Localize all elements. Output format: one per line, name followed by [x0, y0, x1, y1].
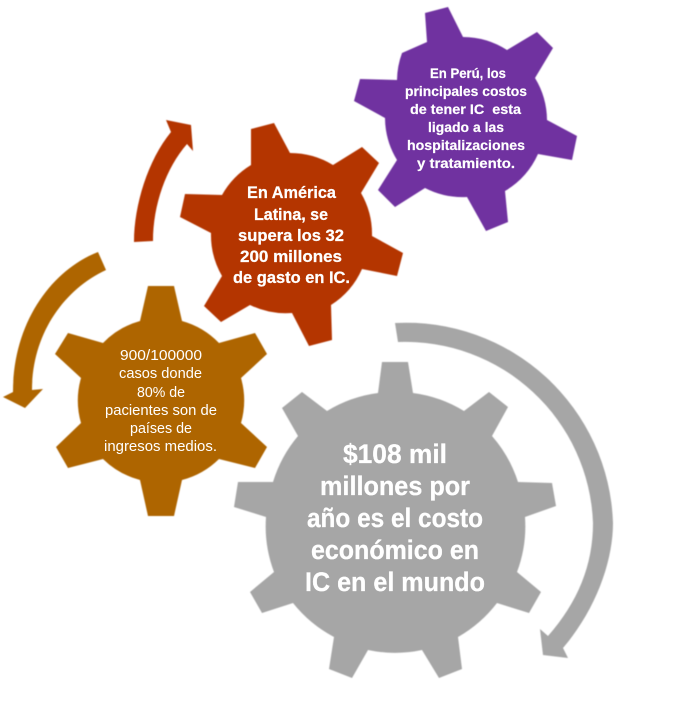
gear shape: purple — [354, 7, 577, 231]
text: world cost: IC en el mundo — [305, 567, 485, 597]
text: Peru costs: En Perú, los — [430, 65, 506, 81]
arrow: orange curved down — [3, 252, 106, 408]
text: Peru costs: principales costos — [405, 83, 527, 99]
text: cases: 900/100000 — [120, 348, 202, 364]
arrow: red curved up — [134, 120, 193, 242]
text: Latin America spending: supera los 32 — [238, 226, 344, 245]
text: Peru costs: de tener IC esta — [410, 101, 521, 117]
text: Peru costs — [405, 65, 527, 171]
text: Latin America spending: 200 millones — [240, 247, 342, 266]
gear shape: orange — [55, 286, 267, 516]
text: cases — [104, 348, 217, 455]
text: Latin America spending: En América — [247, 183, 337, 202]
text: Peru costs: ligado a las — [428, 119, 504, 135]
panel: cases gear — [55, 286, 267, 516]
text: cases: ingresos medios. — [104, 439, 217, 455]
panel: Latin America gear — [180, 123, 403, 346]
text: Latin America spending — [233, 183, 350, 287]
text: Peru costs: hospitalizaciones — [407, 137, 525, 153]
panel: world gear — [234, 362, 556, 678]
text: world cost — [305, 439, 485, 597]
text: Latin America spending: Latina, se — [254, 205, 328, 224]
gear shape: red — [180, 123, 403, 346]
text: world cost: año es el costo — [307, 503, 483, 533]
text: cases: 80% de — [137, 385, 185, 401]
text: cases: países de — [130, 421, 192, 437]
text: world cost: económico en — [311, 535, 479, 565]
text: cases: casos donde — [119, 366, 202, 382]
panel: Peru gear — [354, 7, 577, 231]
text: world cost: $108 mil — [343, 439, 447, 469]
arrow: gray circular — [395, 323, 613, 658]
text: cases: pacientes son de — [105, 403, 217, 419]
text: world cost: millones por — [320, 471, 470, 501]
text: Latin America spending: de gasto en IC. — [233, 268, 350, 287]
gear shape: gray — [234, 362, 556, 678]
text: Peru costs: y tratamiento. — [417, 155, 515, 171]
